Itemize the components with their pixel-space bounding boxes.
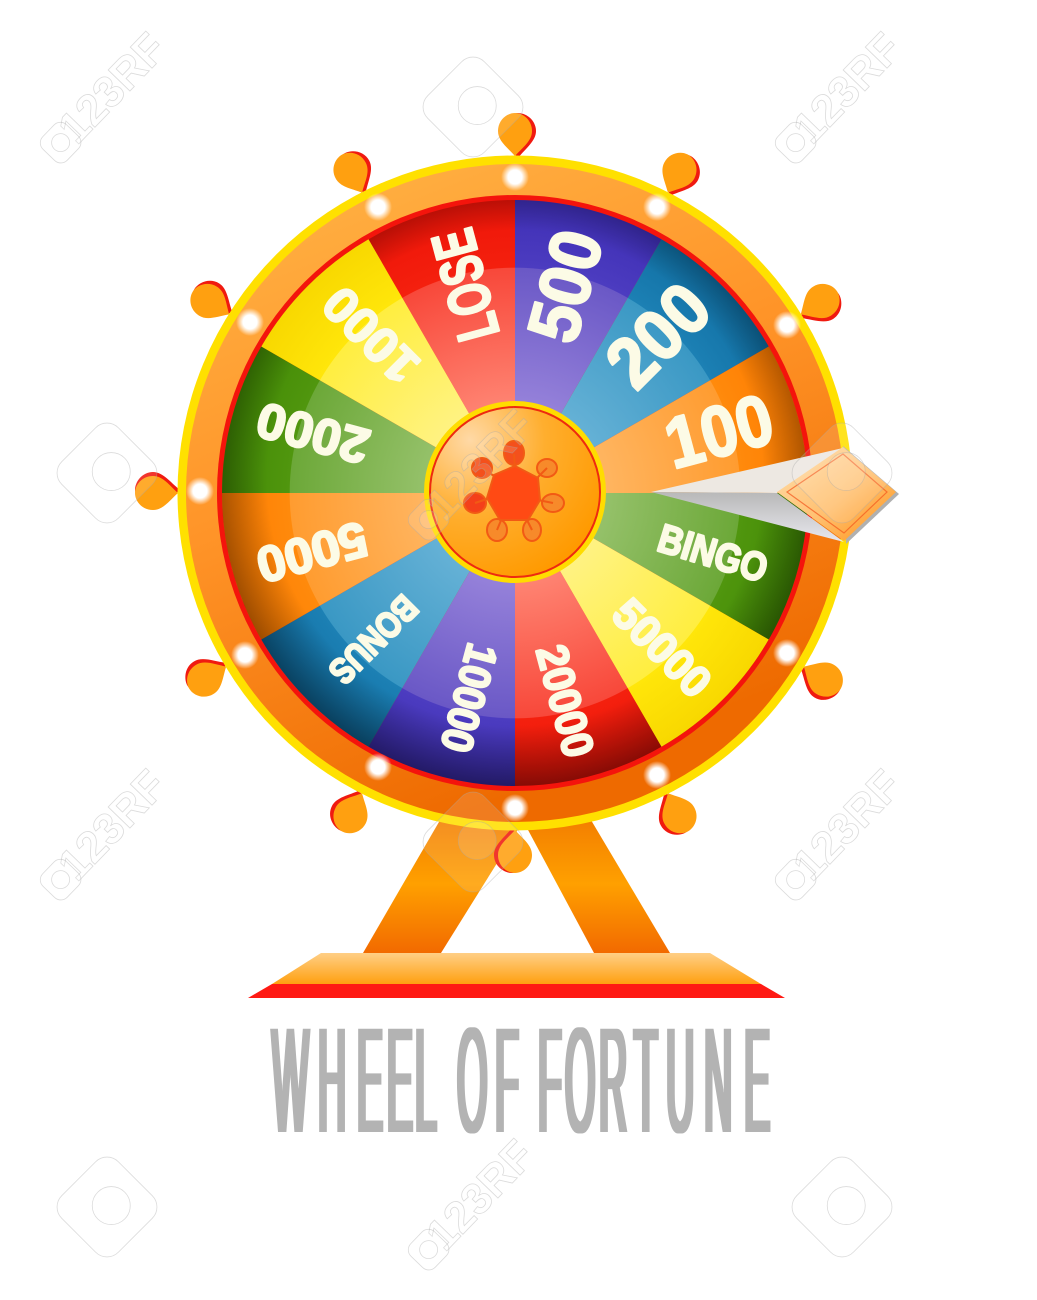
label 2000: 2000 — [251, 391, 375, 475]
watermark text stamps: 123RF — [784, 24, 911, 153]
wedge: 500 — [515, 200, 662, 493]
label 1000: 1000 — [312, 276, 430, 394]
wedge: 100 — [515, 346, 808, 493]
watermark text stamps: 123RF — [784, 761, 911, 890]
title: WHEEL OF FORTUNE — [272, 998, 770, 1165]
watermark text stamps: 123RF — [49, 24, 176, 153]
wedge labels — [251, 222, 782, 763]
wedge: 200 — [515, 239, 769, 493]
wedge: 2000 — [222, 346, 515, 493]
label lose: LOSE — [419, 222, 512, 348]
stand base — [248, 953, 785, 998]
label bonus: BONUS — [321, 587, 426, 692]
wedge: 10000 — [368, 493, 515, 786]
label 10000: 10000 — [431, 638, 506, 757]
stand legs — [363, 815, 670, 953]
watermark text stamps: 123RF — [417, 401, 544, 530]
watermark text stamps: 123RF — [49, 761, 176, 890]
wedge: 1000 — [261, 239, 515, 493]
label 200: 200 — [591, 268, 727, 404]
wedge: 50000 — [515, 493, 769, 747]
rim lights — [186, 163, 801, 822]
wheel rim — [178, 156, 852, 830]
watermark camera stamps — [50, 50, 899, 1264]
label 5000: 5000 — [251, 510, 373, 594]
wedge: bingo — [515, 493, 808, 640]
watermark text stamps: 123RF — [417, 1131, 544, 1260]
wedge: bonus — [261, 493, 515, 747]
wedge: 5000 — [222, 493, 515, 640]
wedge: 20000 — [515, 493, 662, 786]
label 50000: 50000 — [603, 589, 721, 707]
decorative teardrops around rim — [135, 113, 849, 873]
center hub — [424, 401, 606, 583]
label 20000: 20000 — [526, 640, 603, 763]
pointer — [651, 446, 899, 544]
label 100: 100 — [657, 379, 782, 485]
wheel wedges — [222, 200, 808, 786]
wedge: lose — [368, 200, 515, 493]
label bingo: BINGO — [653, 517, 773, 591]
pointer diamond — [843, 446, 899, 544]
hub flower icon — [464, 441, 564, 541]
label 500: 500 — [513, 222, 619, 351]
